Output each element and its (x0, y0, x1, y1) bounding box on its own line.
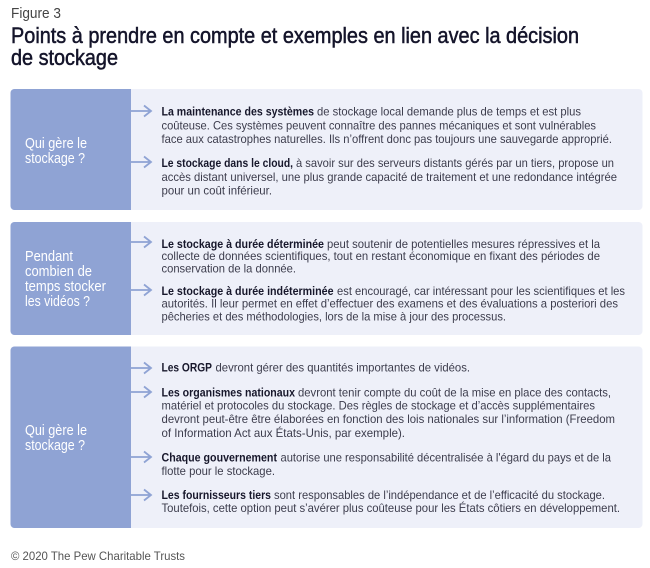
text block: indefinite storage: est encouragé, car intéressant pour les scientifiques et les (337, 284, 625, 298)
arrow (131, 156, 151, 168)
text block: indefinite storage: autorités. Il leur permet en effet d’effectuer des examens et des évaluations a posteriori des (162, 296, 618, 310)
question block: les vidéos ? (25, 293, 90, 310)
arrow (131, 236, 151, 248)
figure label: Figure 3 (11, 5, 61, 22)
text block: system maintenance (162, 104, 612, 146)
text block: cloud storage: Le stockage dans le cloud, (162, 156, 293, 170)
text block: fixed duration storage: peut soutenir de potentielles mesures répressives et la (327, 237, 600, 251)
text block: cloud storage: pour un coût inférieur. (162, 184, 272, 198)
text block: national bodies: Les organismes nationaux (162, 386, 295, 400)
text block: cloud storage: à savoir sur des serveurs distants gérés par un tiers, propose un (296, 156, 614, 170)
question block (10, 222, 131, 335)
text block: system maintenance: La maintenance des systèmes (162, 104, 314, 118)
text block: indefinite storage (162, 284, 625, 324)
text block: indefinite storage: Le stockage à durée indéterminée (162, 284, 334, 298)
text block: third-party providers (162, 488, 620, 515)
question block: combien de (25, 263, 92, 280)
arrow (131, 284, 151, 296)
question block: stockage ? (25, 437, 85, 454)
text block: third-party providers: sont responsables de l’indépendance et de l’efficacité du stockage. (274, 488, 605, 502)
question block: temps stocker (25, 278, 106, 295)
question block: stockage ? (25, 150, 85, 167)
panel: who manages storage (10, 346, 642, 528)
question block: Qui gère le (25, 135, 87, 152)
panel: storage management (10, 89, 642, 210)
text block: national bodies (162, 386, 615, 440)
text block: national bodies: of Information Act aux États-Unis, par exemple). (162, 425, 405, 440)
text block: fixed duration storage (162, 237, 600, 276)
text block: indefinite storage: pêcheries et des méthodologies, lors de la mise à jour des processus. (162, 310, 506, 324)
question block (10, 346, 131, 528)
question block: Pendant (25, 248, 74, 265)
text block: each government: autorise une responsabilité décentralisée à l'égard du pays et de la (280, 450, 611, 464)
text block: system maintenance: de stockage local demande plus de temps et est plus (317, 104, 581, 118)
text block: each government: Chaque gouvernement (162, 450, 277, 464)
text block: system maintenance: coûteuse. Ces systèmes peuvent connaître des pannes mécaniques et sont vulnérables (162, 118, 596, 132)
text block: national bodies: devront tenir compte du coût de la mise en place des contacts, (298, 386, 611, 400)
arrow (131, 386, 151, 398)
text block: fixed duration storage: Le stockage à durée déterminée (162, 237, 324, 251)
text block: third-party providers: Les fournisseurs tiers (162, 488, 271, 502)
footer credit: © 2020 The Pew Charitable Trusts (11, 549, 185, 563)
panel: storage duration (10, 222, 642, 335)
text block: fixed duration storage: collecte de données scientifiques, tout en restant économique en fixant des périodes de (162, 249, 600, 263)
question block: Qui gère le (25, 422, 87, 439)
text block: third-party providers: Toutefois, cette option peut s’avérer plus coûteuse pour les États côtiers en développement. (162, 500, 620, 515)
question block (10, 89, 131, 210)
text block: each government: flotte pour le stockage. (162, 464, 275, 478)
arrow (131, 106, 151, 116)
title: Points à prendre en compte et exemples en lien avec la décision (11, 23, 579, 48)
text block: RFMOs: Les ORGP (162, 360, 212, 374)
arrow (131, 490, 151, 500)
text block: national bodies: matériel et protocoles du stockage. Des règles de stockage et d’accès supplémentaires (162, 398, 595, 412)
title: de stockage (11, 45, 118, 70)
text block: system maintenance: face aux catastrophes naturelles. Ils n’offrent donc pas toujours une sauvegarde approprié. (162, 132, 612, 146)
text block: RFMOs: devront gérer des quantités importantes de vidéos. (216, 360, 470, 374)
arrow (131, 452, 151, 462)
text block: each government (162, 450, 611, 478)
arrow (131, 362, 151, 374)
text block: national bodies: devront peut-être être élaborées en fonction des lois nationales sur l’information (Freedom (162, 412, 615, 426)
title (11, 23, 579, 70)
text block: fixed duration storage: conservation de la donnée. (162, 262, 296, 276)
text block: cloud storage: accès distant universel, une plus grande capacité de traitement et une redondance intégrée (162, 170, 617, 184)
text block: cloud storage (162, 156, 617, 198)
